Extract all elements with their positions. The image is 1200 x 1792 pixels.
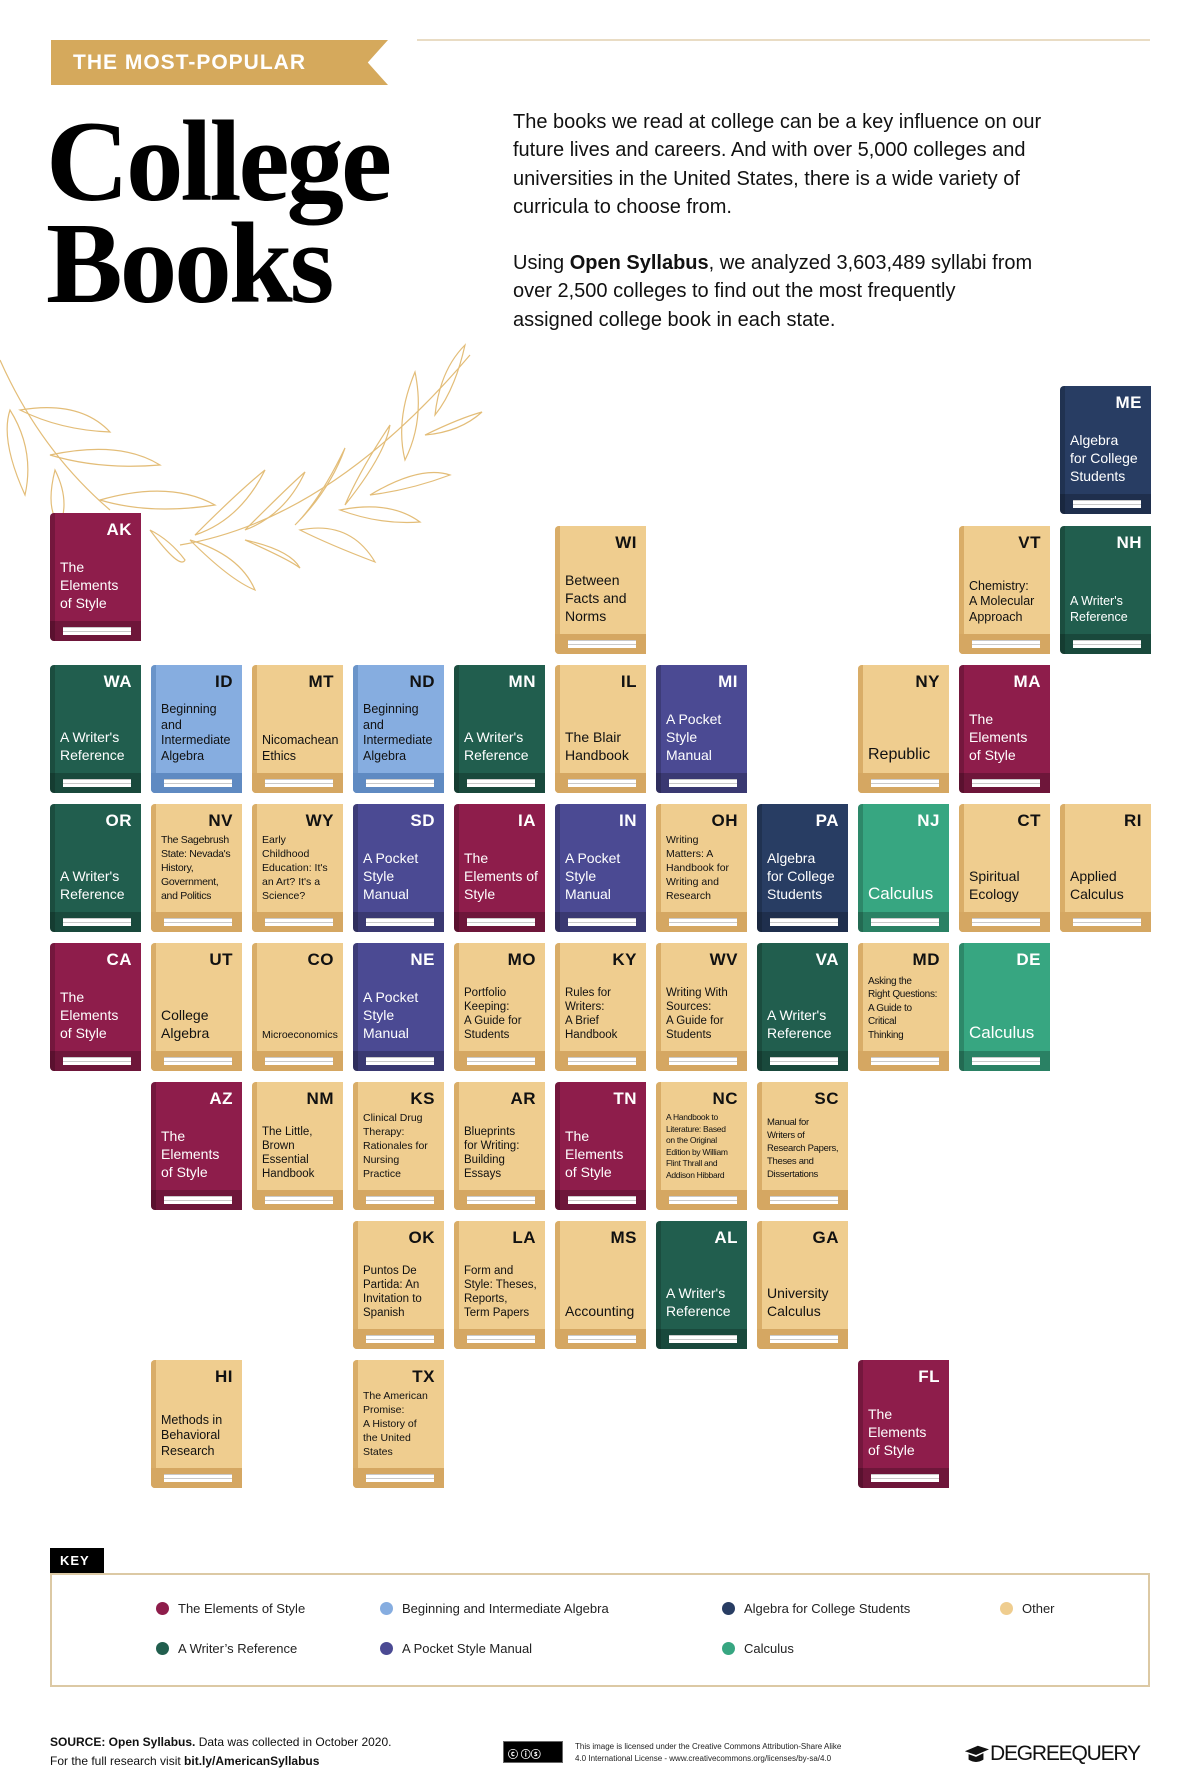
source text: SOURCE: Open Syllabus. Data was collected in October 2020. [50,1735,391,1749]
book: FL: The [868,1406,892,1422]
legend: pocket style: A Pocket Style Manual [402,1641,532,1656]
book: WY: Science? [262,890,305,902]
book: RI [1060,804,1151,932]
book: SC: Writers of [767,1130,804,1141]
book: IA [454,804,545,932]
book: RI: Applied [1070,868,1117,884]
book: NM [252,1082,343,1210]
book: OH: Research [666,890,711,902]
book: IN: Manual [565,886,611,902]
book: OK: Invitation to [363,1293,422,1305]
book: WY: Childhood [262,848,309,860]
book: FL: Elements [868,1424,926,1440]
book: OH: OH [712,811,738,830]
book: WV: Sources: [666,1001,711,1013]
book: AK: of Style [60,595,107,611]
book: KS: Rationales for [363,1140,428,1152]
book: MD [858,943,949,1071]
cc license: This image is licensed under the Creative Commons Attribution-Share Alike [575,1742,841,1751]
book: ID: Intermediate [161,733,230,747]
book: MI: MI [718,672,738,691]
book: AK: The [60,559,84,575]
book: KS [353,1082,444,1210]
book: AL: AL [714,1228,738,1247]
book: ME: for College [1070,450,1138,466]
book: SC: SC [814,1089,839,1108]
book: VA: VA [816,950,839,969]
book: AK: Elements [60,577,118,593]
book: NE [353,943,444,1071]
book: MT: Nicomachean [262,733,338,747]
book: ID: and [161,718,182,732]
book: VA: Reference [767,1025,832,1041]
book: OR: Reference [60,886,125,902]
book: MO: MO [508,950,536,969]
book: FL [858,1360,949,1488]
book: OH: Writing and [666,876,719,888]
book: MN [454,665,545,793]
book: NY: Republic [868,746,930,763]
book: SD: SD [410,811,435,830]
book: WV: Writing With [666,987,728,999]
book: NM: Essential [262,1154,309,1166]
book: OH: Matters: A [666,848,713,860]
book: OK: Spanish [363,1307,405,1319]
book: MI: A Pocket [666,711,721,727]
book: WY: Early [262,834,286,846]
book: IN [555,804,646,932]
book: TX: The American [363,1390,428,1402]
book: TX: A History of [363,1418,417,1430]
book: MI: Manual [666,747,712,763]
book: AR [454,1082,545,1210]
book: SC: Research Papers, [767,1143,838,1154]
book: VA [757,943,848,1071]
book: AR: AR [510,1089,536,1108]
book: IL: Handbook [565,747,629,763]
book: ME: Algebra [1070,432,1118,448]
book: NV: NV [208,811,233,830]
book: WV [656,943,747,1071]
book: MO: Portfolio [464,987,506,999]
title [46,98,390,327]
book: WI [555,526,646,654]
book: VT: VT [1018,533,1041,552]
book: ND [353,665,444,793]
book: DE [959,943,1050,1071]
book: ND: Beginning [363,702,419,716]
book: MT: MT [308,672,334,691]
book: OR [50,804,141,932]
book: MA [959,665,1050,793]
book: GA: GA [812,1228,839,1247]
book: WA: WA [104,672,132,691]
book: AK [50,513,141,641]
book: SD [353,804,444,932]
book: ID: Beginning [161,702,217,716]
book: RI: RI [1124,811,1142,830]
book: GA [757,1221,848,1349]
book: NM: NM [307,1089,334,1108]
book: SC: Dissertations [767,1169,818,1180]
intro text: The books we read at college can be a key influence on our [513,111,1041,133]
book: IL [555,665,646,793]
key label: KEY [60,1553,90,1568]
book: OH [656,804,747,932]
book: HI: Research [161,1444,214,1458]
book: NC: Literature: Based [666,1124,726,1134]
book: IL: The Blair [565,729,621,745]
book: MA: Elements [969,729,1027,745]
book: KY: KY [612,950,637,969]
book: HI: Behavioral [161,1428,220,1442]
book: SC: Manual for [767,1117,809,1128]
book: NV: History, [161,862,193,874]
book: MT: Ethics [262,748,296,762]
book: MD: Right Questions: [868,989,937,1000]
legend: algebra for college: Algebra for College Students [744,1601,910,1616]
book: SD: Manual [363,886,409,902]
book: NV: State: Nevada's [161,848,230,860]
book: AR: for Writing: [464,1140,519,1152]
book: CA [50,943,141,1071]
legend: other: Other [1022,1601,1055,1616]
book: NC: Addison Hibbard [666,1170,724,1180]
book: NM: The Little, [262,1126,312,1138]
book: FL: FL [918,1367,940,1386]
book: ME: Students [1070,468,1125,484]
book: AR: Blueprints [464,1126,515,1138]
icon: cc badge [503,1741,563,1763]
book: OK: OK [408,1228,435,1247]
book: NE: A Pocket [363,989,418,1005]
book: RI: Calculus [1070,886,1124,902]
intro text: Using Open Syllabus, we analyzed 3,603,489 syllabi from [513,252,1032,274]
book: CT: CT [1017,811,1041,830]
book: CA: The [60,989,84,1005]
book: IL: IL [621,672,637,691]
source text: For the full research visit bit.ly/AmericanSyllabus [50,1754,319,1768]
book: NC: NC [712,1089,738,1108]
book: KS: Clinical Drug [363,1112,423,1124]
laurel decoration [0,343,482,591]
book: MD: Critical [868,1016,896,1027]
book: MO: Students [464,1029,509,1041]
book: KS: Nursing [363,1154,399,1166]
icon: cc badge: ⓒ ⓘⓢ [508,1750,541,1761]
book: NH [1060,526,1151,654]
book: AZ: The [161,1128,185,1144]
logo: degreequery: DEGREEQUERY [990,1742,1140,1765]
book: LA: Form and [464,1265,513,1277]
book: CO: Microeconomics [262,1029,338,1041]
book: UT: Algebra [161,1025,209,1041]
book: NE: NE [410,950,435,969]
book: AL: Reference [666,1303,731,1319]
title: College [46,98,389,225]
book: ME [1060,386,1151,514]
book: WY: Education: It's [262,862,328,874]
book: MA: of Style [969,747,1016,763]
book: VT: Approach [969,610,1023,624]
book: MA: MA [1014,672,1041,691]
book: UT: UT [209,950,233,969]
book: KS: Practice [363,1168,401,1180]
legend: writer's reference: A Writer’s Reference [178,1641,297,1656]
book: CO: CO [308,950,334,969]
book: OR: OR [106,811,132,830]
intro text: assigned college book in each state. [513,309,835,331]
book: ND: Intermediate [363,733,432,747]
book: WI: WI [615,533,637,552]
book: TN [555,1082,646,1210]
book: ID [151,665,242,793]
book: VT: Chemistry: [969,578,1029,592]
book: SC: Theses and [767,1156,814,1167]
book: AZ: Elements [161,1146,219,1162]
book: NJ: Calculus [868,884,933,903]
book: WA: A Writer's [60,729,119,745]
book: UT [151,943,242,1071]
key box [50,1573,1150,1687]
intro text: future lives and careers. And with over 5,000 colleges and [513,139,1026,161]
book: IN: IN [619,811,637,830]
book: NC: Flint Thrall and [666,1158,717,1168]
book: OK: Partida: An [363,1279,419,1291]
book: PA: Algebra [767,850,815,866]
book: TN: of Style [565,1164,612,1180]
book: AR: Building [464,1154,505,1166]
book: NC: A Handbook to [666,1112,718,1122]
intro text [513,111,1041,331]
book: IA: Elements of [464,868,538,884]
book: MS: MS [610,1228,637,1247]
book: KY: A Brief [565,1015,599,1027]
book: LA: Style: Theses, [464,1279,537,1291]
book: MS: Accounting [565,1303,634,1319]
legend: calculus: Calculus [744,1641,794,1656]
book: VT: A Molecular [969,594,1034,608]
header rule [417,39,1150,41]
book: NV: Government, [161,876,218,888]
book: MD: Asking the [868,976,912,986]
book: NE: Manual [363,1025,409,1041]
book: WI: Between [565,572,619,588]
book: PA: for College [767,868,835,884]
book: AL: A Writer's [666,1285,725,1301]
book: TX: the United [363,1432,411,1444]
book: AZ [151,1082,242,1210]
book: WI: Norms [565,608,606,624]
legend: beginning algebra: Beginning and Intermediate Algebra [402,1601,609,1616]
book: IN: Style [565,868,596,884]
book: TX: States [363,1446,393,1458]
book: IN: A Pocket [565,850,620,866]
book: KY [555,943,646,1071]
book: NC [656,1082,747,1210]
book: NV: The Sagebrush [161,834,229,846]
book: HI: Methods in [161,1412,222,1426]
book: OR: A Writer's [60,868,119,884]
book: GA: Calculus [767,1303,821,1319]
book: ME: ME [1116,393,1142,412]
book: CT [959,804,1050,932]
book: KS: KS [410,1089,435,1108]
book: AZ: of Style [161,1164,208,1180]
book: MN: MN [509,672,536,691]
cc license [503,1741,841,1763]
book: CT: Spiritual [969,868,1020,884]
banner: the most-popular: THE MOST-POPULAR [73,51,306,74]
book: VT [959,526,1050,654]
book: MO [454,943,545,1071]
book: WA: Reference [60,747,125,763]
book: DE: Calculus [969,1023,1034,1042]
book: WY: WY [306,811,334,830]
book: WI: Facts and [565,590,626,606]
book: VA: A Writer's [767,1007,826,1023]
book: AK: AK [106,520,132,539]
book: WV: A Guide for [666,1015,724,1027]
key label [50,1548,104,1573]
book: NC: on the Original [666,1135,717,1145]
book: NH: Reference [1070,610,1128,624]
book: LA: Term Papers [464,1307,529,1319]
book: NH: NH [1116,533,1142,552]
book: ND: Algebra [363,748,406,762]
intro text: curricula to choose from. [513,196,732,218]
banner: the most-popular [51,40,388,85]
book: SD: Style [363,868,394,884]
book: KY: Handbook [565,1029,617,1041]
book: OH: Writing [666,834,698,846]
book: SC [757,1082,848,1210]
book: TX: TX [412,1367,435,1386]
book: NJ [858,804,949,932]
book: MN: Reference [464,747,529,763]
book: KY: Rules for [565,987,611,999]
book: PA: PA [816,811,839,830]
book: TX: Promise: [363,1404,404,1416]
book: ND: ND [409,672,435,691]
book: MA: The [969,711,993,727]
book: AZ: AZ [209,1089,233,1108]
book: CA: CA [106,950,132,969]
book: WV: Students [666,1029,711,1041]
book: MO: A Guide for [464,1015,522,1027]
book: LA: Reports, [464,1293,507,1305]
book: NJ: NJ [917,811,940,830]
title: Books [46,200,331,327]
book: MS [555,1221,646,1349]
book: NE: Style [363,1007,394,1023]
book: WA [50,665,141,793]
book: CA: of Style [60,1025,107,1041]
book: MT [252,665,343,793]
legend: other [1000,1601,1055,1616]
book: AL [656,1221,747,1349]
book: NV: and Politics [161,890,211,902]
book: ID: ID [215,672,233,691]
book: WV: WV [710,950,738,969]
cc license: 4.0 International License - www.creativecommons.org/licenses/by-sa/4.0 [575,1754,831,1763]
intro text: universities in the United States, there is a wide variety of [513,168,1020,190]
book: MO: Keeping: [464,1001,509,1013]
book: NY [858,665,949,793]
book: PA: Students [767,886,822,902]
book: MD: MD [913,950,940,969]
book: IA: IA [518,811,536,830]
book: MD: Thinking [868,1030,903,1040]
book: SD: A Pocket [363,850,418,866]
book: UT: College [161,1007,208,1023]
book: LA [454,1221,545,1349]
book: ND: and [363,718,384,732]
book: MN: A Writer's [464,729,523,745]
book: PA [757,804,848,932]
book: DE: DE [1016,950,1041,969]
book: OK [353,1221,444,1349]
book: OH: Handbook for [666,862,729,874]
book: ID: Algebra [161,748,204,762]
book: KY: Writers: [565,1001,604,1013]
book: TN: Elements [565,1146,623,1162]
book: LA: LA [512,1228,536,1247]
legend: calculus [722,1641,794,1656]
legend: elements of style: The Elements of Style [178,1601,305,1616]
book: TN: TN [613,1089,637,1108]
book: NC: Edition by William [666,1146,728,1156]
book: TN: The [565,1128,589,1144]
book: KS: Therapy: [363,1126,404,1138]
book: MI: Style [666,729,697,745]
book: NM: Brown [262,1140,295,1152]
book: NH: A Writer's [1070,594,1123,608]
book: HI: HI [215,1367,233,1386]
book: NV [151,804,242,932]
book: GA: University [767,1285,828,1301]
book: MI [656,665,747,793]
book: OK: Puntos De [363,1265,417,1277]
source text [50,1735,391,1768]
book: FL: of Style [868,1442,915,1458]
book: CA: Elements [60,1007,118,1023]
book: AR: Essays [464,1168,501,1180]
book: CT: Ecology [969,886,1019,902]
book: WY: an Art? It's a [262,876,320,888]
intro text: over 2,500 colleges to find out the most frequently [513,280,956,302]
book: IA: The [464,850,488,866]
book: MD: A Guide to [868,1002,912,1014]
book: IA: Style [464,886,495,902]
book: NY: NY [915,672,940,691]
book: CO [252,943,343,1071]
book: WY [252,804,343,932]
book: TX [353,1360,444,1488]
book: NM: Handbook [262,1168,314,1180]
book: HI [151,1360,242,1488]
